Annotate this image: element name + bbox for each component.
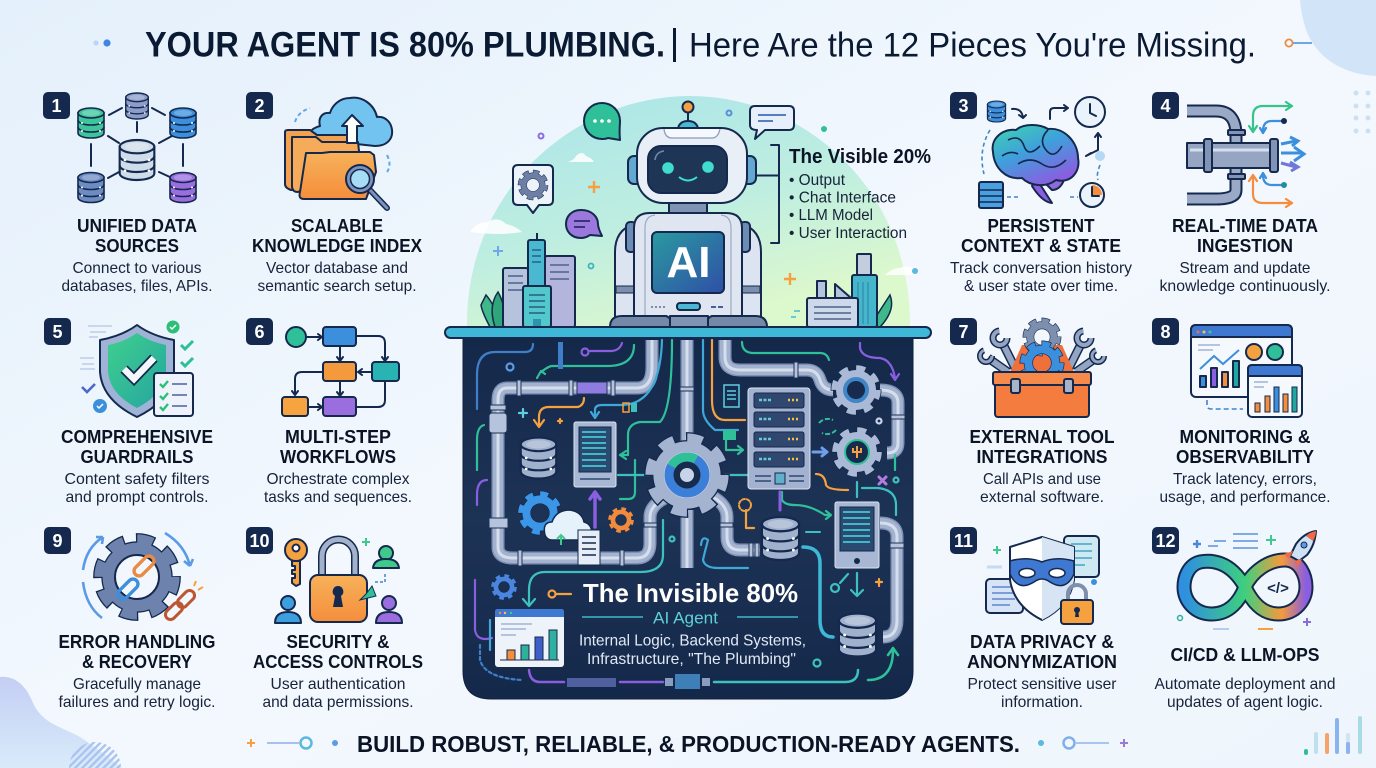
card description: and data permissions. [262,694,414,711]
robot antenna [678,102,698,128]
title: YOUR AGENT IS 80% PLUMBING. [145,26,665,64]
heading: the invisible 80 percent: The Invisible 80% [583,578,798,608]
card description: external software. [980,489,1104,506]
decorative blob top right [1300,0,1376,76]
icon: green chat bubble [584,103,620,140]
card description: Content safety filters [64,471,210,488]
badge 9 [44,527,71,554]
panel: card 1 unified data sources [43,92,212,295]
icon: masked shield with lock [986,536,1099,624]
card description [1160,260,1330,295]
icon: message bubble [750,106,794,139]
description: internal logic: Internal Logic, Backend Systems, [579,632,806,650]
card heading: INGESTION [1197,235,1293,256]
card heading [77,215,197,256]
card description [1160,471,1330,506]
icon: big server [748,388,810,489]
badge 10 [246,527,273,554]
robot base [610,316,767,327]
badge 3 [950,92,977,119]
badge 5 [44,318,71,345]
title [93,26,1312,64]
panel: card 10 security and access controls [246,527,423,711]
card heading [253,631,423,672]
icon: folders, cloud and magnifier [285,98,392,208]
robot head [637,128,747,203]
badge 5: 5 [52,322,63,342]
card heading [58,631,216,672]
card description: Track latency, errors, [1173,471,1317,488]
card heading: REAL-TIME DATA [1172,215,1318,236]
icon: bottom devices [567,674,710,689]
card heading: MULTI-STEP [285,426,391,447]
card heading [1172,215,1318,256]
card heading: SOURCES [95,235,179,256]
decorative dots top right [1354,90,1370,134]
card description: updates of agent logic. [1167,694,1323,711]
robot body [634,213,742,327]
clouds [470,153,915,275]
badge 3: 3 [958,96,969,116]
card heading [967,631,1117,672]
card description: Protect sensitive user [968,676,1117,693]
description: internal logic [579,632,806,668]
badge 7 [950,318,977,345]
icon: dashboards [1191,325,1302,417]
panel: center invisible 80 percent plumbing [463,338,913,699]
badge 9: 9 [52,531,63,551]
icon: toolbox with wrenches [980,321,1104,417]
card description: Vector database and [266,260,408,277]
panel: card 2 scalable knowledge index [246,92,423,295]
card heading: GUARDRAILS [80,446,194,467]
badge 1 [43,92,70,119]
card description [64,471,210,506]
pipe joints [489,362,905,566]
badge 4 [1152,92,1179,119]
illustration: right city [791,254,892,327]
card heading: ANONYMIZATION [967,651,1117,672]
card description: failures and retry logic. [58,694,216,711]
panel: card 7 external tool integrations [950,318,1114,506]
badge 2: 2 [254,96,265,116]
card description [58,676,216,711]
card description [262,676,414,711]
card description [980,471,1104,506]
icon: purple bubble [566,210,602,238]
underground panel [463,338,913,699]
card description: information. [1001,694,1083,711]
icon: dashboard window [495,609,564,667]
card heading: DATA PRIVACY & [970,631,1114,652]
card heading: SCALABLE [291,215,383,236]
icon: infinity loop with rocket [1178,531,1316,629]
icon: central gear [652,440,722,510]
icon: infinity loop with rocket: </> [1267,580,1289,597]
badge 11 [950,527,977,554]
icon: bottom database [839,614,876,656]
card description [264,471,412,506]
icon: small blue gear [493,576,515,598]
card heading: OBSERVABILITY [1176,446,1315,467]
description: internal logic: Infrastructure, "The Plumbing" [587,651,796,668]
icon: shield with checklist [80,320,193,417]
pipes [498,340,898,637]
robot neck [669,203,707,215]
doc and tags [558,342,739,440]
card description: Call APIs and use [983,471,1101,488]
icon: gear with broken chain [83,533,203,622]
icon: left tablet [574,422,616,487]
list: visible items: • Output [789,172,846,189]
badge 10: 10 [249,531,270,551]
badge 2 [246,92,273,119]
card heading: EXTERNAL TOOL [970,426,1114,447]
panel: card 12 CI/CD and LLM-ops [1152,527,1336,711]
card heading: & RECOVERY [82,651,193,672]
panel: card 9 error handling and recovery [44,527,216,711]
dome background [467,96,910,328]
decorative blob bottom left [0,677,122,768]
icon: gear bubble [513,165,553,213]
panel: card 11 data privacy and anonymization [950,527,1117,711]
icon: workflow diagram [282,327,399,416]
card description [1154,676,1336,711]
illustration: robot [610,102,767,327]
card heading: PERSISTENT [988,215,1095,236]
icon: gears right [819,369,878,473]
card description [62,260,212,295]
card heading: CI/CD & LLM-OPS [1170,644,1320,665]
card description: knowledge continuously. [1160,278,1330,295]
card heading: UNIFIED DATA [77,215,197,236]
badge 12 [1152,527,1179,554]
icon: padlock, key and users [275,538,402,623]
card heading: ERROR HANDLING [58,631,216,652]
card heading: COMPREHENSIVE [61,426,213,447]
title: Here Are the 12 Pieces You're Missing. [689,26,1256,64]
card heading: INTEGRATIONS [976,446,1108,467]
icon: left database [521,438,556,478]
card description: Connect to various [72,260,202,277]
card heading [61,426,213,467]
icon: blue gear, cloud and document [522,495,632,565]
small decorations [493,110,918,285]
card description: Orchestrate complex [266,471,410,488]
list: visible items [789,172,907,242]
list: visible items: • Chat Interface [789,190,896,206]
panel: card 5 comprehensive guardrails [44,318,213,506]
table top divider [445,327,931,338]
card heading [280,426,396,467]
robot arms [615,222,761,327]
card description [258,260,416,295]
card description: and prompt controls. [66,489,208,506]
card heading: WORKFLOWS [280,446,396,467]
label: AI agent: AI Agent [653,608,718,628]
list: visible items: • User Interaction [789,225,907,242]
card description: Track conversation history [950,260,1132,277]
card heading: MONITORING & [1180,426,1310,447]
badge 8: 8 [1160,322,1171,342]
list: visible items: • LLM Model [789,207,873,224]
illustration: left city [481,233,575,327]
badge 4: 4 [1160,96,1171,116]
panel: center visible 20 percent scene [467,96,931,328]
badge 6: 6 [254,322,265,342]
decorative bars bottom right [1306,718,1360,753]
card heading: SECURITY & [286,631,390,652]
card description: databases, files, APIs. [62,278,212,295]
badge 11: 11 [954,531,973,551]
icon: right tablet [835,502,879,568]
card heading: CONTEXT & STATE [961,235,1121,256]
badge 7: 7 [958,322,969,342]
card description: User authentication [270,676,406,693]
badge 6 [246,318,273,345]
card heading [252,215,423,256]
icon: connected databases [78,93,196,202]
footer tagline: BUILD ROBUST, RELIABLE, & PRODUCTION-READY AGENTS. [357,731,1020,757]
card heading: ACCESS CONTROLS [253,651,423,672]
heading: the visible 20 percent: The Visible 20% [789,146,931,168]
robot ears [628,156,756,184]
card description: Stream and update [1180,260,1311,277]
badge 1: 1 [51,96,62,116]
icon: middle database [762,517,799,560]
badge 12: 12 [1155,531,1176,551]
card heading [1176,426,1315,467]
card heading [970,426,1114,467]
robot body: AI [666,238,710,287]
panel: card 6 multi-step workflows [246,318,412,506]
card heading: KNOWLEDGE INDEX [252,235,423,256]
icon: branching pipes with arrows [1187,102,1304,207]
card description: usage, and performance. [1160,489,1330,506]
card description: Automate deployment and [1154,676,1336,693]
card description: Gracefully manage [73,676,201,693]
thin circuit lines [475,340,899,682]
card description: semantic search setup. [258,278,416,295]
card description: & user state over time. [964,278,1118,295]
badge 8 [1152,318,1179,345]
card description [950,260,1132,295]
panel: card 3 persistent context and state [950,92,1132,295]
icon: brain with clocks [979,97,1105,208]
card heading [961,215,1121,256]
bracket [757,145,779,243]
card description: tasks and sequences. [264,489,412,506]
card description [968,676,1117,711]
panel: card 8 monitoring and observability [1152,318,1330,506]
panel: card 4 real-time data ingestion [1152,92,1330,295]
